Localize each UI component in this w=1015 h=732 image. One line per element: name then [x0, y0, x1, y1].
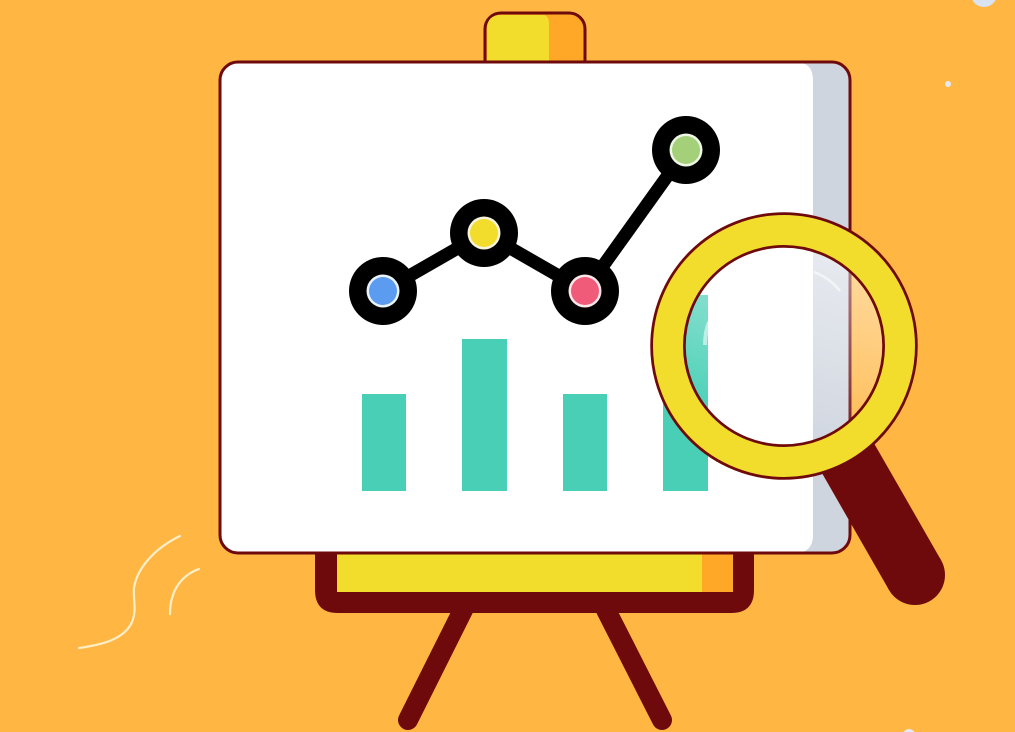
magnifier handle [845, 453, 945, 605]
line chart [349, 116, 720, 325]
decorative swirl lines [79, 536, 199, 648]
data point: pink [551, 257, 619, 325]
easel legs [408, 600, 662, 720]
presentation board [220, 62, 850, 553]
data point: yellow [450, 199, 518, 267]
easel top tab [485, 13, 585, 83]
data point: blue [349, 257, 417, 325]
magnifier lens glass [686, 252, 882, 420]
easel tray [315, 545, 754, 613]
magnifier ring [668, 230, 900, 462]
decorative dots [903, 0, 997, 732]
bar chart [362, 295, 708, 491]
data point: green [652, 116, 720, 184]
magnifying glass [668, 230, 945, 605]
